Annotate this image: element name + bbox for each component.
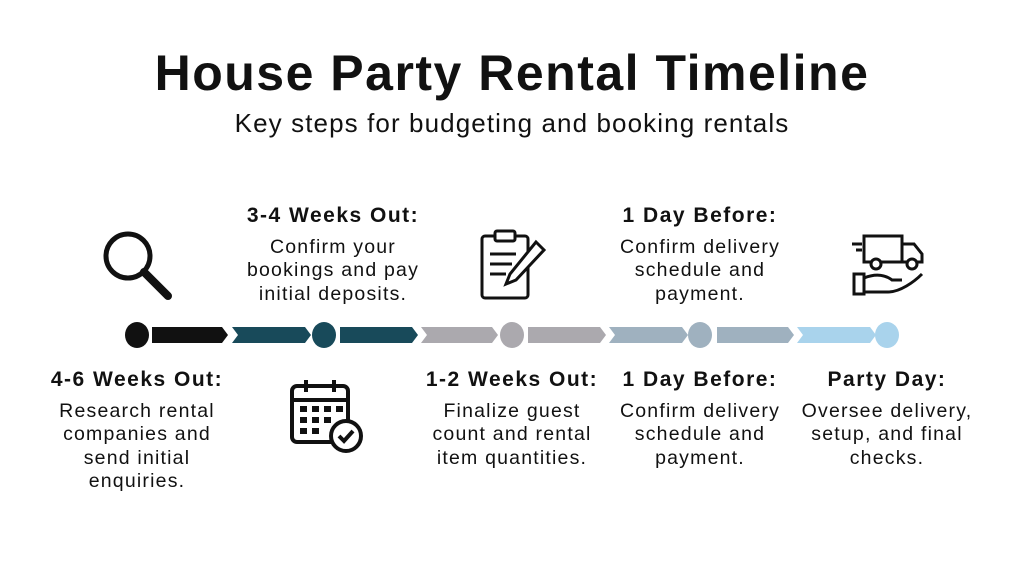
text: 1 day before top: 1 Day Before: bbox=[623, 204, 777, 227]
text: 4-6 weeks bbox=[51, 368, 223, 492]
text: 4-6 weeks: send initial bbox=[84, 446, 190, 468]
text: 4-6 weeks: Research rental bbox=[59, 400, 215, 422]
text: 1-2 weeks: 1-2 Weeks Out: bbox=[426, 368, 598, 391]
icon: calendar bbox=[290, 380, 363, 453]
text: 4-6 weeks: companies and bbox=[63, 423, 211, 445]
text: 1 day before bottom bbox=[620, 368, 780, 468]
title: House Party Rental Timeline bbox=[155, 45, 869, 101]
text: 3-4 weeks: bookings and pay bbox=[247, 259, 419, 281]
icon: magnifier bbox=[104, 232, 172, 300]
text: 1 day before top: Confirm delivery bbox=[620, 236, 780, 258]
text: party day: Oversee delivery, bbox=[802, 400, 972, 422]
text: 1 day before top: payment. bbox=[655, 282, 745, 304]
text: 1 day before bottom: payment. bbox=[655, 446, 745, 468]
text: party day bbox=[802, 368, 972, 468]
text: 3-4 weeks: 3-4 Weeks Out: bbox=[247, 204, 419, 227]
subtitle: Key steps for budgeting and booking rentals bbox=[235, 108, 789, 138]
icon: clipboard bbox=[480, 230, 546, 300]
icon: truck delivery bbox=[852, 234, 924, 296]
text: 1 day before top bbox=[620, 204, 780, 304]
text: 1 day before top: schedule and bbox=[635, 259, 765, 281]
text: 1 day before bottom: 1 Day Before: bbox=[623, 368, 777, 391]
text: 4-6 weeks: 4-6 Weeks Out: bbox=[51, 368, 223, 391]
text: 3-4 weeks: initial deposits. bbox=[259, 282, 407, 304]
text: 3-4 weeks bbox=[247, 204, 419, 304]
text: 1-2 weeks: item quantities. bbox=[437, 446, 587, 468]
text: party day: checks. bbox=[850, 446, 924, 468]
text: 1 day before bottom: Confirm delivery bbox=[620, 400, 780, 422]
text: 3-4 weeks: Confirm your bbox=[270, 236, 396, 258]
text: party day: Party Day: bbox=[828, 368, 946, 391]
text: 1-2 weeks: Finalize guest bbox=[443, 400, 581, 422]
text: 1 day before bottom: schedule and bbox=[635, 423, 765, 445]
text: party day: setup, and final bbox=[811, 423, 963, 445]
text: 1-2 weeks: count and rental bbox=[432, 423, 592, 445]
text: 1-2 weeks bbox=[426, 368, 598, 468]
text: 4-6 weeks: enquiries. bbox=[89, 470, 185, 492]
